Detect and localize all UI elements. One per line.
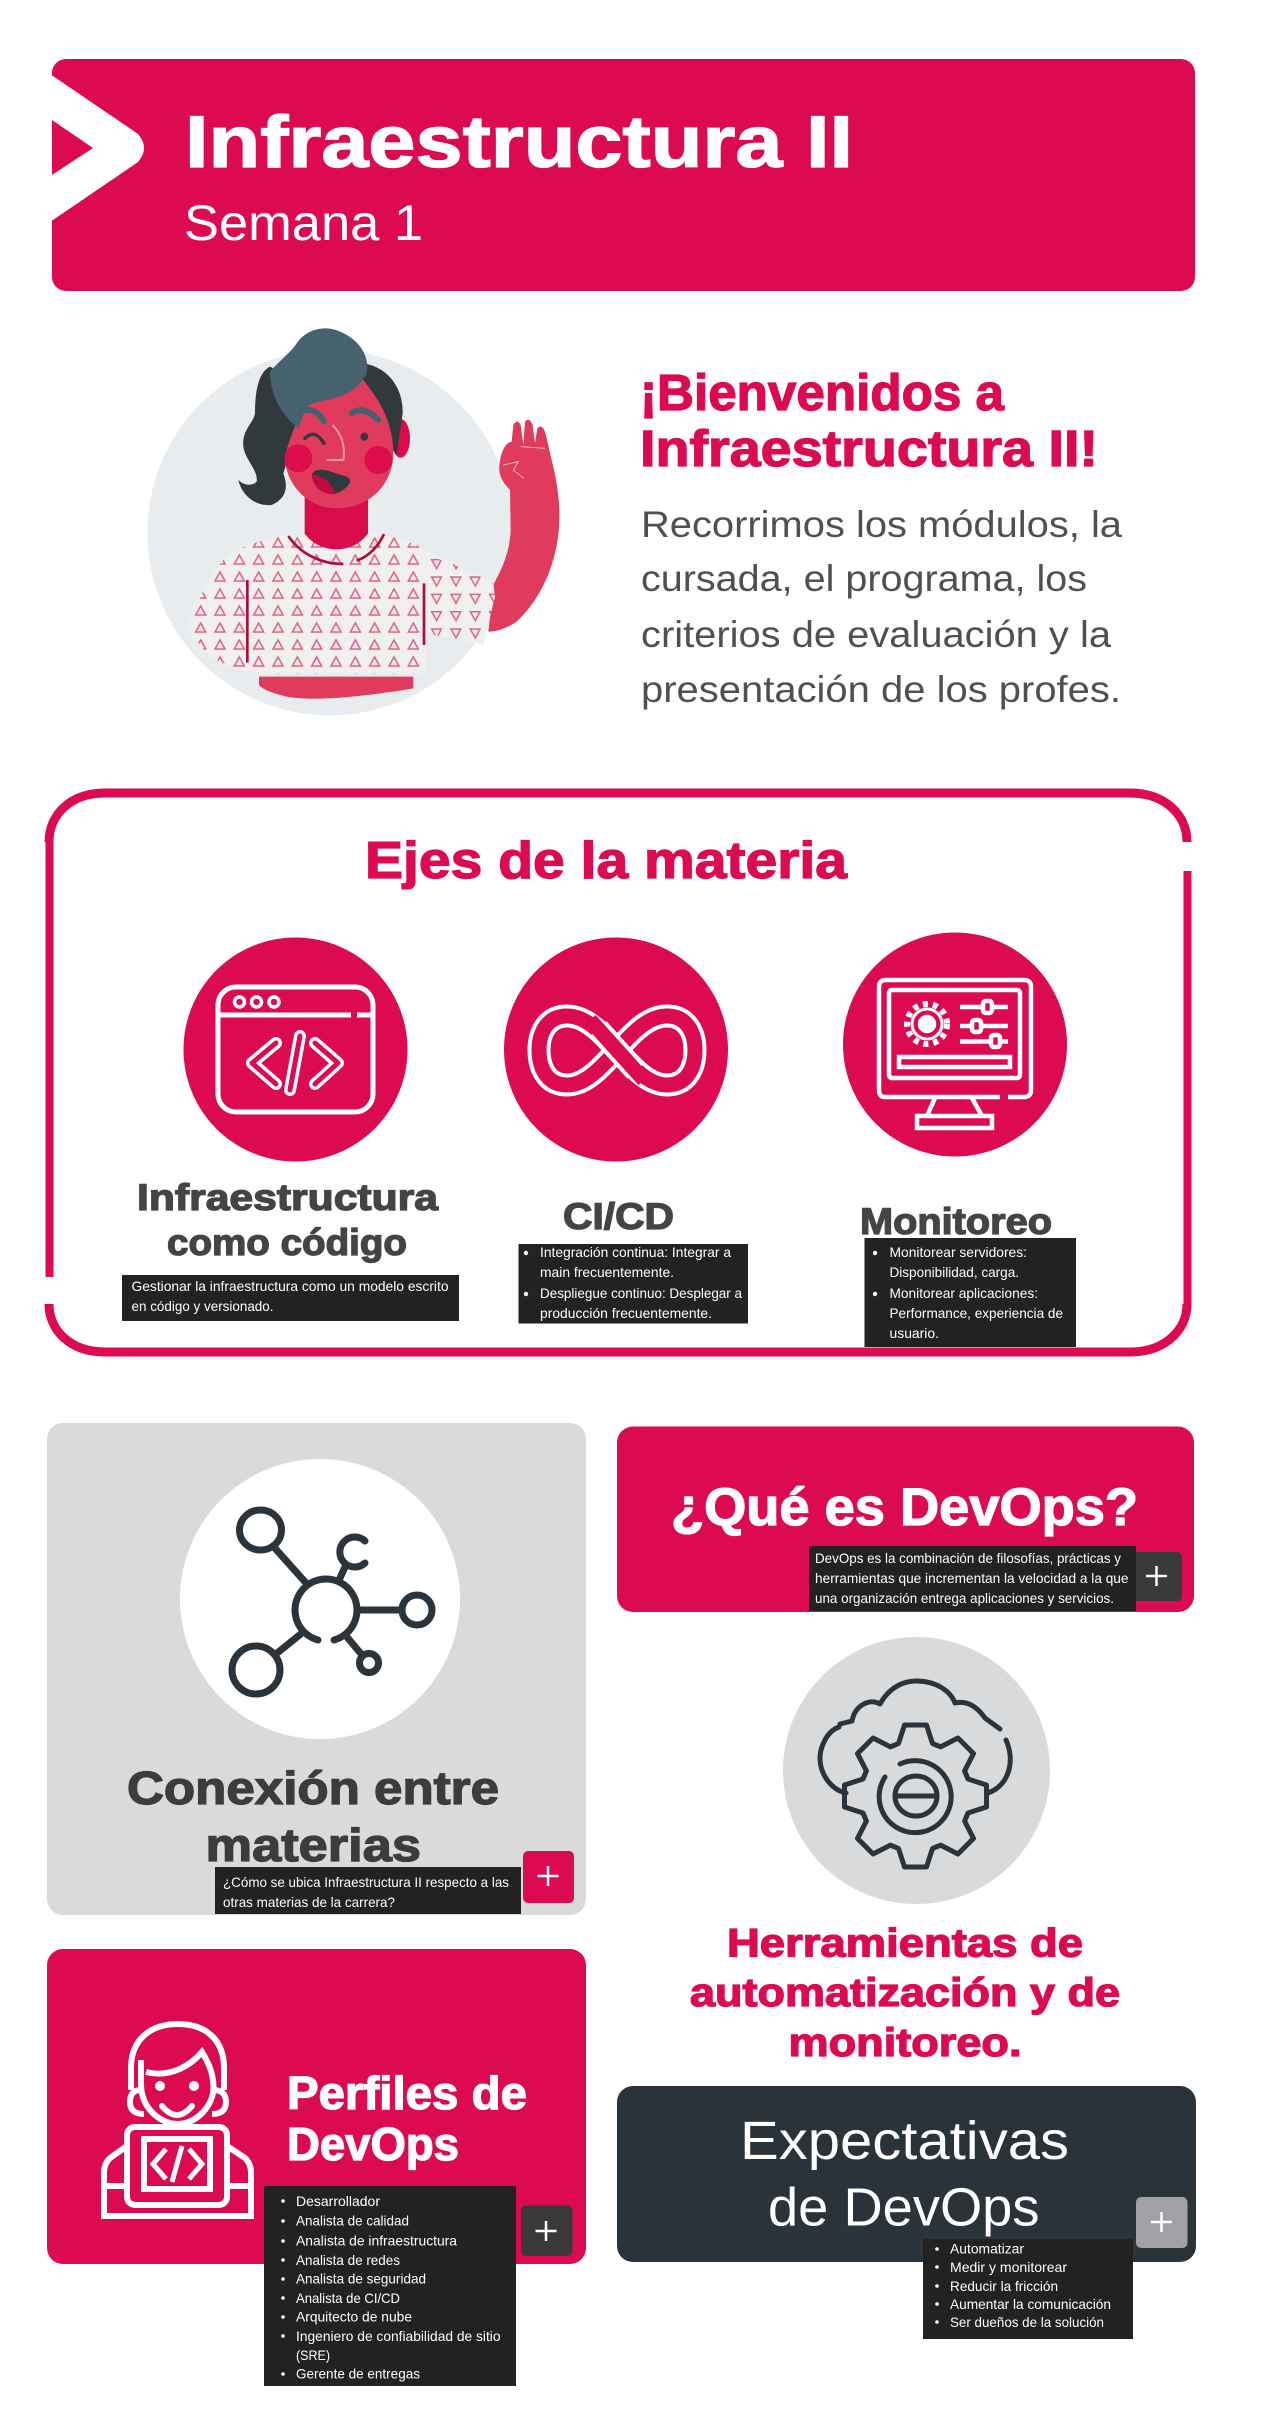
- tooltip: una organización entrega aplicaciones y servicios.: [815, 1590, 1114, 1606]
- tooltip list: Ser dueños de la solución: [950, 2314, 1104, 2330]
- tooltip list: Aumentar la comunicación: [950, 2296, 1111, 2312]
- heading: DevOps: [287, 2118, 459, 2170]
- tooltip: [215, 1867, 521, 1914]
- tooltip list: Automatizar: [950, 2240, 1024, 2256]
- tooltip: infraestructura como código: [122, 1275, 459, 1321]
- tooltip list: Arquitecto de nube: [296, 2308, 412, 2324]
- heading: herramientas: monitoreo.: [788, 2021, 1022, 2065]
- tooltip: ¿Cómo se ubica Infraestructura II respecto a las: [223, 1874, 509, 1890]
- label: monitoreo: Monitoreo: [860, 1201, 1052, 1242]
- tooltip list: Analista de seguridad: [296, 2270, 426, 2286]
- tooltip list: [923, 2239, 1133, 2339]
- tooltip list: Analista de redes: [296, 2252, 400, 2268]
- welcome paragraph: criterios de evaluación y la: [641, 614, 1111, 655]
- tooltip list: (SRE): [296, 2347, 330, 2363]
- tooltip: DevOps es la combinación de filosofías, prácticas y: [815, 1550, 1121, 1566]
- heading: Ejes de la materia: [365, 832, 848, 890]
- heading: herramientas: [690, 1922, 1120, 2065]
- tooltip: monitoreo: Monitorear servidores:: [890, 1244, 1027, 1260]
- tooltip: [809, 1546, 1136, 1611]
- label: infraestructura como código: [137, 1177, 438, 1263]
- heading: herramientas: automatización y de: [690, 1971, 1120, 2015]
- label: infraestructura como código: como código: [167, 1222, 407, 1263]
- tooltip list: Ingeniero de confiabilidad de sitio: [296, 2328, 501, 2344]
- heading: Conexión entre: [127, 1762, 499, 1814]
- tooltip: monitoreo: Performance, experiencia de: [890, 1305, 1063, 1321]
- heading: de DevOps: [768, 2178, 1040, 2238]
- tooltip list: Analista de calidad: [296, 2212, 409, 2228]
- tooltip: CI/CD: Despliegue continuo: Desplegar a: [540, 1285, 742, 1301]
- panel: perfiles de DevOps: [47, 1949, 586, 2386]
- header banner: [50, 59, 1195, 291]
- tooltip: CI/CD: [518, 1244, 748, 1324]
- welcome paragraph: Recorrimos los módulos, la: [641, 504, 1122, 545]
- tooltip: CI/CD: Integración continua: Integrar a: [540, 1244, 731, 1260]
- panel: ejes de la materia: [49, 793, 1188, 1352]
- heading: [127, 1762, 499, 1871]
- heading: [740, 2111, 1069, 2238]
- illustration: waving person: [147, 328, 559, 715]
- heading: Perfiles de: [287, 2067, 527, 2119]
- heading: herramientas: Herramientas de: [727, 1922, 1083, 1966]
- icon: developer with laptop: [104, 2024, 251, 2216]
- welcome paragraph: [641, 504, 1122, 710]
- tooltip: monitoreo: [864, 1238, 1076, 1347]
- title: Infraestructura II: [185, 102, 853, 183]
- welcome paragraph: presentación de los profes.: [641, 669, 1121, 710]
- tooltip: CI/CD: main frecuentemente.: [540, 1264, 674, 1280]
- welcome paragraph: cursada, el programa, los: [641, 558, 1087, 599]
- icon: code window: [184, 938, 408, 1162]
- icon: chevron: [50, 74, 144, 222]
- plus button: [521, 2206, 572, 2256]
- heading: materias: [206, 1819, 421, 1871]
- tooltip list: Medir y monitorear: [950, 2259, 1067, 2275]
- subtitle: Semana 1: [184, 195, 423, 251]
- icon: infinity loop: [504, 938, 728, 1162]
- tooltip: otras materias de la carrera?: [223, 1894, 395, 1910]
- tooltip: monitoreo: usuario.: [890, 1325, 939, 1341]
- tooltip: herramientas que incrementan la velocidad a la que: [815, 1570, 1129, 1586]
- tooltip: monitoreo: Monitorear aplicaciones:: [890, 1285, 1038, 1301]
- tooltip list: Analista de CI/CD: [296, 2290, 400, 2306]
- tooltip list: Reducir la fricción: [950, 2278, 1058, 2294]
- icon: network nodes: [232, 1510, 432, 1694]
- tooltip: CI/CD: producción frecuentemente.: [540, 1305, 712, 1321]
- heading: [287, 2067, 527, 2170]
- tooltip list: Desarrollador: [296, 2193, 380, 2209]
- tooltip list: Analista de infraestructura: [296, 2232, 457, 2248]
- tooltip list: [264, 2186, 516, 2386]
- tooltip list: Gerente de entregas: [296, 2366, 420, 2382]
- panel: conexión entre materias: [47, 1423, 586, 1915]
- panel: qué es DevOps: [617, 1426, 1194, 1612]
- icon: monitor with settings: [843, 932, 1067, 1156]
- welcome heading: [640, 364, 1098, 477]
- heading: Expectativas: [740, 2111, 1069, 2171]
- plus button: [523, 1851, 574, 1903]
- tooltip: infraestructura como código: Gestionar la infraestructura como un modelo escrito: [132, 1278, 449, 1294]
- heading: ¿Qué es DevOps?: [671, 1478, 1138, 1537]
- icon: cloud with gear: [783, 1637, 1050, 1904]
- label: infraestructura como código: Infraestructura: [137, 1177, 438, 1218]
- panel: expectativas de DevOps: [617, 2086, 1196, 2339]
- tooltip: monitoreo: Disponibilidad, carga.: [890, 1264, 1019, 1280]
- welcome heading: ¡Bienvenidos a: [640, 364, 1005, 421]
- panel border: [49, 793, 1188, 1352]
- welcome heading: Infraestructura II!: [640, 420, 1098, 477]
- plus button: [1136, 2197, 1188, 2248]
- plus button: [1125, 1552, 1182, 1601]
- label: CI/CD: CI/CD: [563, 1196, 674, 1237]
- tooltip: infraestructura como código: en código y versionado.: [132, 1298, 274, 1314]
